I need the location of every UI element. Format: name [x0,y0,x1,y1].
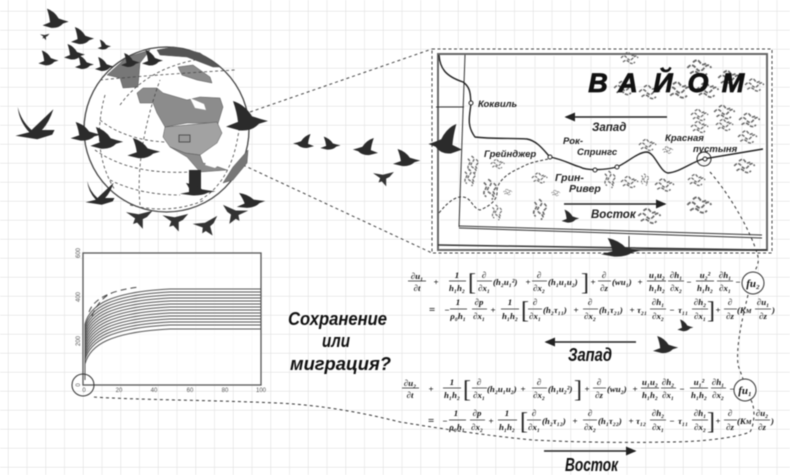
equation row 2: ∂h₂ [652,408,664,418]
equation row 2: ∂x₁ [652,422,664,432]
equation row 2: ∂x₂ [584,311,596,321]
birds on map [428,124,641,257]
equation row 2: ∂z [726,311,734,321]
equation: eastward momentum row set 1: ∂x₂ [533,283,545,293]
equation: northward momentum row set 2: [ [463,377,471,403]
west arrow and label: Запад [568,345,612,365]
equation row 2: ∂ [728,297,732,307]
equation row 2: ∂ [728,408,732,418]
equation: eastward momentum row set 1: h₁h₂ [449,283,465,293]
equation: northward momentum row set 2: ∂ [537,377,541,387]
equation: northward momentum row set 2: h₁h₂ [691,390,707,400]
equation row 2: ∂x₂ [584,422,596,432]
equation row 2: [ [521,298,529,324]
towns [469,101,711,172]
equation row 2: h₁h₂ [502,311,518,321]
equation row 2: − [669,305,675,315]
equation: eastward momentum row set 1: (wu₁) [612,277,632,287]
equation: eastward momentum row set 1: + [590,277,596,287]
equation: eastward momentum row set 1: h₁h₂ [697,283,713,293]
equation row 2: τ₁₁ [678,305,688,315]
equation: northward momentum row set 2: − [679,384,685,394]
equation: eastward momentum row set 1: h₁h₂ [649,283,665,293]
axis labels: 60 [187,388,194,394]
equation row 2: τ₁₂ [636,416,646,426]
heading: conservation or migration: миграция? [290,354,391,374]
equation row 2: (h₁τ₂₂) [598,416,622,426]
birds flying between globe and map [293,134,420,186]
dashed projection lines from globe to map [243,49,432,253]
equation row 2: ∂p [475,297,484,307]
map title: А [617,68,638,98]
east arrow and label [544,451,635,475]
map title: В [588,68,608,98]
flock of birds around the globe [15,9,268,240]
equation row 2: ∂x₁ [529,311,541,321]
equation: northward momentum row set 2: h₁h₂ [444,390,460,400]
town labels: Ривер [569,183,601,195]
equation row 2: ρ₀h₁ [448,422,465,432]
equation: eastward momentum row set 1: ∂h₁ [670,270,682,280]
equation: eastward momentum row set 1: − [686,277,692,287]
map title: Й [653,66,673,98]
equation row 2 [428,408,774,435]
equation row 2: ∂u₁ [757,297,769,307]
equation row 2: (KM [737,416,752,426]
equation row 2: ∂z [759,311,767,321]
equation: eastward momentum row set 1: − [735,277,741,287]
axis labels: 0 [76,383,82,387]
west arrow and label [546,342,636,365]
axis labels: 40 [151,388,158,394]
equation: northward momentum row set 2: ] [574,377,582,403]
equation row 2: ] [707,298,715,324]
continents [107,47,248,183]
equation: northward momentum row set 2: ∂t [407,390,414,400]
equation: eastward momentum row set 1: ∂ [602,270,606,280]
equation row 2: = [428,415,434,427]
panel: Wyoming map [428,49,772,257]
town labels: Красная [665,133,704,144]
state borders [436,55,767,250]
equation: eastward momentum row set 1: u₁u₂ [649,270,665,280]
equation row 2: ∂x₂ [652,311,664,321]
axis labels: 100 [256,388,267,394]
equation row 2: h₁h₂ [499,422,515,432]
east arrow and label: Восток [591,209,637,221]
equation: northward momentum row set 2: ∂h₂ [662,377,674,387]
equation row 2: ∂z [726,422,734,432]
equation row 2: (KM [737,305,752,315]
equation: eastward momentum row set 1: [ [468,270,476,296]
equation row 2: + [629,305,635,315]
equation: northward momentum row set 2: (h₂u₁u₂) [487,384,517,394]
equation row 2: + [572,416,578,426]
equation row 2: ∂ [533,297,537,307]
equation: northward momentum row set 2: 1 [450,377,454,387]
equation: eastward momentum row set 1: ∂x₁ [478,283,490,293]
equation: eastward momentum row set 1: ∂t [414,283,421,293]
axis labels: 80 [222,388,229,394]
equation row 2: ) [770,416,774,426]
equation: northward momentum row set 2: fu₁ [738,385,752,397]
equation row 2: ∂x₁ [694,311,706,321]
equation row 2: + [488,416,494,426]
town labels: Рок- [563,136,583,147]
equation row 2: ∂x₁ [528,422,540,432]
dashed upper curves [89,287,140,316]
globe with North America [84,47,249,212]
equation: eastward momentum row set 1: ∂u₁ [411,271,423,281]
equation: northward momentum row set 2: h₁h₂ [642,390,658,400]
equation: northward momentum row set 2: ∂ [597,377,601,387]
equation: northward momentum row set 2: + [520,384,526,394]
equation row 2: − [442,416,448,426]
equation: northward momentum row set 2: + [428,384,434,394]
equation row 2: ∂z [758,422,766,432]
equation: northward momentum row set 2: (wu₂) [607,384,627,394]
equation: eastward momentum row set 1: ∂ [482,270,486,280]
heading: conservation or migration: или [322,331,350,351]
equation row 2: − [444,305,450,315]
equation: eastward momentum row set 1: (h₁u₁u₂) [548,277,578,287]
equation: northward momentum row set 2: ∂h₁ [712,377,724,387]
equation row 2: ] [707,409,715,435]
equation row 2: ∂x₂ [694,422,706,432]
axis labels: 400 [76,291,82,302]
equation row 2: − [669,416,675,426]
town labels: Спрингс [577,147,618,158]
inland lakes and bays [179,98,228,168]
equation: eastward momentum row set 1: + [525,277,531,287]
equation row 2: + [715,416,721,426]
scrub and mountain marks [463,52,764,223]
equation: northward momentum row set 2 [402,377,774,435]
equation row 2: ∂p [473,408,482,418]
equation: eastward momentum row set 1: ∂x₁ [719,283,731,293]
globe dashed graticule [95,60,240,209]
line chart [72,247,267,396]
map title [588,66,745,98]
equation: eastward momentum row set 1: ∂ [537,270,541,280]
equation row 2 [429,297,775,324]
equation row 2: [ [520,409,528,435]
equation: eastward momentum row set 1: 1 [455,270,459,280]
west arrow and label [566,117,667,134]
equation row 2: (h₁τ₂₁) [599,305,623,315]
equation row 2: ∂x₁ [473,311,485,321]
equation: northward momentum row set 2: (h₁u₂²) [548,384,572,394]
west arrow and label: Запад [592,122,626,134]
equation row 2: + [628,416,634,426]
road and railway route [439,55,763,173]
equation: eastward momentum row set 1: ∂h₁ [719,270,731,280]
equation: northward momentum row set 2: u₁² [694,377,705,387]
axis labels: 20 [116,388,123,394]
equation row 2: ∂u₂ [756,408,768,418]
equation: eastward momentum row set 1: + [433,277,439,287]
equation row 2: 1 [508,297,512,307]
equation row 2: + [715,305,721,315]
equation: northward momentum row set 2: ∂ [477,377,481,387]
equation row 2: τ₁₁ [678,416,688,426]
axis labels [76,247,267,394]
equation row 2: (h₂τ₁₂) [542,416,566,426]
equation row 2: 1 [456,297,460,307]
equation row 2: τ₂₁ [637,305,647,315]
equation: northward momentum row set 2: ∂x₂ [712,390,724,400]
equation row 2: ∂ [532,408,536,418]
equation row 2: (h₂τ₁₁) [543,305,567,315]
small birds near west arrow [653,319,693,353]
equation row 2: + [573,305,579,315]
equation row 2: ρ₀h₁ [449,311,466,321]
equation: northward momentum row set 2: + [632,384,638,394]
dashed connector from red desert to equations [93,172,758,442]
equation: eastward momentum row set 1 [408,270,775,324]
equation: northward momentum row set 2: u₁u₂ [642,377,658,387]
heading: conservation or migration [288,309,391,374]
equation row 2: = [429,304,435,316]
equation: northward momentum row set 2: − [729,384,735,394]
equation row 2: ∂h₂ [694,297,706,307]
east arrow and label [564,204,665,221]
map title: О [687,68,709,98]
dashed side route [439,159,548,213]
origin circle [72,374,94,396]
equation row 2: 1 [454,408,458,418]
equation row 2: ∂ [588,297,592,307]
equation row 2: + [490,305,496,315]
equation row 2: ∂h₁ [694,408,706,418]
east arrow and label: Восток [565,455,619,475]
axis labels: 0 [82,388,86,394]
equation: northward momentum row set 2: ∂u₂ [404,378,416,388]
equation row 2: ∂ [588,408,592,418]
town labels [478,99,738,195]
equation row 2: ) [771,305,775,315]
equation: northward momentum row set 2: ∂x₁ [473,390,485,400]
equation: eastward momentum row set 1: u₂² [700,270,711,280]
equation row 2: ∂x₂ [471,422,483,432]
equation: northward momentum row set 2: ∂z [595,390,603,400]
curves [85,289,261,380]
axis labels: 200 [76,335,82,346]
equation: eastward momentum row set 1: ] [581,270,589,296]
map grid [440,56,765,248]
equation: northward momentum row set 2: ∂x₁ [662,390,674,400]
equation: northward momentum row set 2: ∂x₂ [533,390,545,400]
map title: М [722,68,745,98]
equation: eastward momentum row set 1: + [637,277,643,287]
town labels: пустыня [693,144,738,155]
equation: eastward momentum row set 1: ∂z [600,283,608,293]
equation: eastward momentum row set 1: fu₂ [746,278,760,290]
equation: northward momentum row set 2: + [584,384,590,394]
equation row 2: ∂h₁ [652,297,664,307]
equation row 2: 1 [505,408,509,418]
town labels: Грин- [555,172,584,184]
axis labels: 600 [76,247,82,258]
heading: conservation or migration: Сохранение [288,309,387,329]
town labels: Грейнджер [484,149,536,160]
town labels: Коквиль [478,99,518,110]
equation: eastward momentum row set 1: ∂x₂ [670,283,682,293]
equation: eastward momentum row set 1: (h₂u₁²) [493,277,517,287]
